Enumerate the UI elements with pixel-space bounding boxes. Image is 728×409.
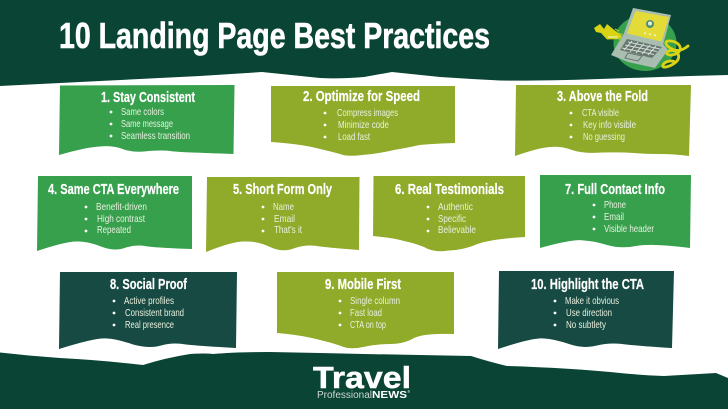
heading 9: 9. Mobile First: [325, 277, 401, 293]
list 4: Benefit-driven: [96, 201, 147, 213]
list 7: [593, 199, 654, 235]
panel 8: Social Proof: [59, 272, 237, 349]
list 4: High contrast: [97, 213, 145, 225]
footer band: [0, 352, 728, 409]
heading 8: 8. Social Proof: [110, 277, 187, 293]
list 8: Real presence: [125, 319, 174, 331]
panel 4: Same CTA Everywhere: [37, 176, 192, 251]
logo: Travel Professional News: Travel: [313, 360, 411, 395]
heading 10: 10. Highlight the CTA: [531, 277, 644, 293]
heading 2: 2. Optimize for Speed: [303, 89, 420, 105]
list 7: Visible header: [604, 223, 654, 235]
list 9: CTA on top: [350, 319, 386, 331]
list 5: That's it: [274, 224, 302, 236]
panel 9: Mobile First: [277, 272, 454, 348]
list 1: [110, 106, 190, 142]
heading 4: 4. Same CTA Everywhere: [48, 182, 179, 198]
list 4: Repeated: [97, 224, 131, 236]
list 3: Key info visible: [583, 119, 636, 131]
list 9: Single column: [350, 295, 400, 307]
heading 6: 6. Real Testimonials: [395, 182, 504, 198]
panel 7: Full Contact Info: [540, 175, 691, 248]
list 1: Same colors: [121, 106, 164, 118]
list 2: [324, 107, 398, 143]
list 3: [570, 107, 636, 143]
logo: Travel Professional News: NEWS: [372, 389, 407, 401]
list 10: Use direction: [566, 307, 612, 319]
logo: Travel Professional News: ®: [408, 390, 410, 394]
list 7: Email: [604, 211, 624, 223]
header band: [0, 0, 728, 86]
panel 10: Highlight the CTA: [498, 271, 674, 349]
list 1: Same message: [121, 118, 173, 130]
list 7: Phone: [604, 199, 626, 211]
list 8: [113, 295, 184, 331]
list 1: Seamless transition: [121, 130, 190, 142]
panel 6: Real Testimonials: [373, 176, 525, 251]
list 8: Active profiles: [124, 295, 174, 307]
heading 7: 7. Full Contact Info: [565, 182, 665, 198]
list 2: Compress images: [337, 107, 398, 119]
panel 5: Short Form Only: [206, 177, 360, 252]
list 9: [339, 295, 400, 331]
list 9: Fast load: [350, 307, 382, 319]
list 2: Load fast: [338, 131, 370, 143]
list 5: Email: [274, 213, 295, 225]
panel 3: Above the Fold: [515, 85, 691, 156]
logo: Travel Professional News: Professional: [317, 390, 372, 401]
icon: laptop with pointing hand: [594, 8, 688, 71]
heading 1: 1. Stay Consistent: [101, 90, 195, 106]
panel 1: Stay Consistent: [59, 85, 234, 155]
list 6: Authentic: [438, 201, 473, 213]
list 10: Make it obvious: [565, 295, 619, 307]
list 5: Name: [273, 201, 294, 213]
list 5: [262, 201, 302, 236]
list 3: No guessing: [583, 131, 625, 143]
title: 10 Landing Page Best Practices: [59, 15, 490, 56]
list 6: Believable: [438, 224, 476, 236]
list 3: CTA visible: [582, 107, 619, 119]
list 4: [85, 201, 147, 236]
list 6: Specific: [438, 213, 466, 225]
list 10: No subtlety: [566, 319, 607, 331]
list 2: Minimize code: [338, 119, 389, 131]
list 8: Consistent brand: [125, 307, 184, 319]
heading 3: 3. Above the Fold: [557, 89, 648, 105]
panel 2: Optimize for Speed: [271, 86, 455, 156]
list 6: [427, 201, 476, 236]
list 10: [554, 295, 619, 331]
heading 5: 5. Short Form Only: [233, 182, 332, 198]
